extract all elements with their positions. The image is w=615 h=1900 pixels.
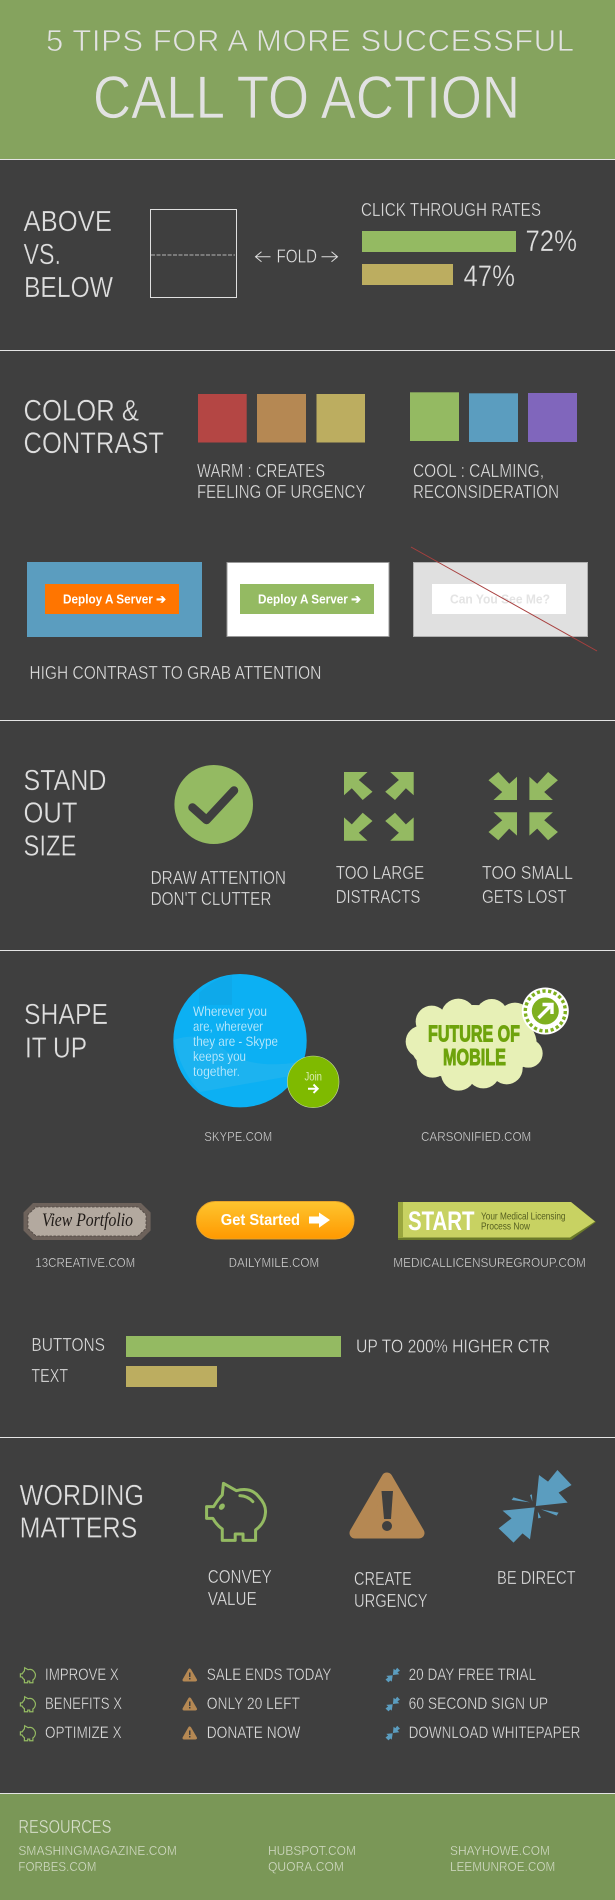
example: get started pill button bbox=[196, 1202, 354, 1239]
example: start arrow button bbox=[398, 1202, 596, 1240]
heading: wording matters: WORDING bbox=[20, 1480, 144, 1512]
cool caption: COOL : CALMING, bbox=[413, 461, 544, 481]
warm swatches bbox=[198, 394, 365, 442]
links column 3: SHAYHOWE.COM bbox=[450, 1843, 550, 1858]
example: orange button on blue bbox=[27, 562, 202, 637]
links column 1: FORBES.COM bbox=[18, 1859, 96, 1874]
caption: high contrast: HIGH CONTRAST TO GRAB ATTENTION bbox=[29, 663, 321, 683]
list: direct phrases: 60 SECOND SIGN UP bbox=[409, 1694, 548, 1713]
caption: draw attention: DON'T CLUTTER bbox=[151, 889, 271, 909]
header band bbox=[0, 0, 615, 160]
label: dailymile.com: DAILYMILE.COM bbox=[229, 1255, 319, 1270]
caption: too large bbox=[336, 863, 424, 907]
heading: stand out size: STAND bbox=[24, 765, 106, 797]
links column 3: LEEMUNROE.COM bbox=[450, 1859, 555, 1874]
example: start arrow button: Your Medical Licensing bbox=[481, 1210, 566, 1222]
icon: small warning bbox=[184, 1699, 196, 1709]
caption: too small: GETS LOST bbox=[482, 887, 567, 907]
example: skype circle button: Wherever you bbox=[193, 1003, 267, 1019]
chart: buttons vs text: BUTTONS bbox=[31, 1335, 105, 1355]
icon: check mark bbox=[174, 765, 253, 844]
caption: too small bbox=[482, 863, 573, 907]
list: value phrases: IMPROVE X bbox=[45, 1665, 119, 1684]
cool caption bbox=[413, 461, 559, 502]
cool swatches bbox=[410, 392, 577, 442]
caption: too small: TOO SMALL bbox=[482, 863, 573, 883]
icon: expanding arrows bbox=[344, 772, 414, 841]
heading: shape it up bbox=[24, 999, 108, 1064]
links column 2: HUBSPOT.COM bbox=[268, 1843, 356, 1858]
icon: small warning bbox=[184, 1670, 196, 1680]
icon: small pig bbox=[20, 1668, 35, 1683]
heading: above vs below: VS. bbox=[24, 239, 61, 271]
panel: stand out size bbox=[24, 765, 573, 909]
example: skype circle button: keeps you bbox=[193, 1048, 246, 1064]
label: skype.com: SKYPE.COM bbox=[204, 1129, 272, 1144]
caption: draw attention: DRAW ATTENTION bbox=[151, 868, 286, 888]
links column 3 bbox=[450, 1843, 555, 1874]
chart: click through rates: 47% bbox=[464, 260, 515, 293]
example: skype circle button bbox=[173, 974, 339, 1108]
chart: buttons vs text bbox=[31, 1335, 550, 1387]
links column 1 bbox=[18, 1843, 177, 1874]
example: orange button on blue: Deploy A Server ➔ bbox=[63, 592, 166, 606]
icon: small direct arrows bbox=[386, 1668, 400, 1682]
example: skype circle button: they are - Skype bbox=[193, 1033, 278, 1049]
example: carsonified cloud button: MOBILE bbox=[443, 1044, 506, 1070]
title line: 5 tips: 5 TIPS FOR A MORE SUCCESSFUL bbox=[46, 23, 574, 58]
label: carsonified.com: CARSONIFIED.COM bbox=[421, 1129, 531, 1144]
panel: above vs below bbox=[24, 199, 577, 304]
icon: small pig bbox=[20, 1697, 35, 1712]
heading: color and contrast bbox=[24, 394, 164, 460]
panel: wording matters bbox=[20, 1470, 580, 1742]
heading: shape it up: SHAPE bbox=[24, 999, 108, 1031]
page fold diagram bbox=[150, 210, 236, 298]
list: direct phrases bbox=[386, 1665, 580, 1742]
example: green button on white: Deploy A Server ➔ bbox=[258, 592, 361, 606]
title: call to action: CALL TO ACTION bbox=[93, 64, 520, 131]
heading: resources: RESOURCES bbox=[18, 1817, 111, 1837]
caption: draw attention bbox=[151, 868, 286, 909]
fold label with arrows bbox=[256, 246, 338, 266]
list: urgency phrases bbox=[184, 1665, 331, 1742]
heading: stand out size: OUT bbox=[24, 798, 78, 830]
list: urgency phrases: DONATE NOW bbox=[207, 1723, 300, 1742]
chart: click through rates bbox=[361, 199, 577, 293]
caption: convey value bbox=[208, 1567, 272, 1609]
footer: resources bbox=[0, 1793, 615, 1900]
example: view portfolio plaque bbox=[24, 1203, 151, 1240]
warm caption: FEELING OF URGENCY bbox=[197, 482, 366, 502]
heading: above vs below: BELOW bbox=[24, 272, 114, 304]
list: value phrases bbox=[20, 1665, 122, 1742]
chart: buttons vs text: TEXT bbox=[31, 1366, 68, 1386]
caption: be direct: BE DIRECT bbox=[497, 1568, 576, 1588]
chart: click through rates: 72% bbox=[526, 225, 577, 258]
heading: above vs below bbox=[24, 206, 114, 304]
list: value phrases: BENEFITS X bbox=[45, 1694, 122, 1713]
example: start arrow button: START bbox=[408, 1206, 475, 1236]
icon: small pig bbox=[20, 1726, 35, 1741]
icon: be direct arrows bbox=[499, 1470, 572, 1543]
heading: above vs below: ABOVE bbox=[24, 206, 112, 238]
caption: too large: TOO LARGE bbox=[336, 863, 424, 883]
links column 1: SMASHINGMAGAZINE.COM bbox=[18, 1843, 177, 1858]
warm caption: WARM : CREATES bbox=[197, 461, 325, 481]
example: skype circle button: are, wherever bbox=[193, 1018, 263, 1034]
chart: buttons vs text: UP TO 200% HIGHER CTR bbox=[356, 1336, 550, 1356]
panel: shape it up bbox=[24, 974, 596, 1387]
links column 2 bbox=[268, 1843, 356, 1874]
heading: shape it up: IT UP bbox=[25, 1032, 87, 1064]
example: green button on white bbox=[227, 562, 389, 636]
cool caption: RECONSIDERATION bbox=[413, 482, 559, 502]
icon: badge with arrow bbox=[522, 988, 569, 1034]
caption: convey value: VALUE bbox=[208, 1589, 257, 1609]
example: low contrast crossed out bbox=[411, 547, 597, 651]
example: low contrast crossed out: Can You See Me? bbox=[450, 592, 550, 606]
heading: color and contrast: CONTRAST bbox=[24, 427, 164, 460]
icon: small direct arrows bbox=[386, 1697, 400, 1711]
caption: create urgency bbox=[354, 1569, 428, 1611]
example: view portfolio plaque: View Portfolio bbox=[42, 1210, 133, 1231]
chart: click through rates: CLICK THROUGH RATES bbox=[361, 199, 541, 220]
heading: wording matters bbox=[20, 1480, 144, 1545]
example: start arrow button: Process Now bbox=[481, 1221, 530, 1233]
heading: wording matters: MATTERS bbox=[20, 1513, 137, 1545]
list: direct phrases: 20 DAY FREE TRIAL bbox=[409, 1665, 536, 1684]
list: urgency phrases: ONLY 20 LEFT bbox=[207, 1694, 300, 1713]
icon: small warning bbox=[184, 1728, 196, 1738]
warm caption bbox=[197, 461, 366, 502]
list: value phrases: OPTIMIZE X bbox=[45, 1723, 122, 1742]
example: carsonified cloud button: FUTURE OF bbox=[428, 1020, 520, 1046]
caption: convey value: CONVEY bbox=[208, 1567, 272, 1587]
icon: warning triangle bbox=[355, 1478, 419, 1533]
example: skype circle button: Join bbox=[304, 1072, 322, 1084]
caption: create urgency: CREATE bbox=[354, 1569, 412, 1589]
example: skype circle button: together. bbox=[193, 1063, 240, 1079]
heading: color and contrast: COLOR & bbox=[24, 394, 139, 428]
icon: small direct arrows bbox=[386, 1726, 400, 1740]
icon: contracting arrows bbox=[488, 772, 558, 840]
panel: color and contrast bbox=[24, 392, 597, 683]
example: get started pill button: Get Started bbox=[221, 1212, 300, 1229]
heading: stand out size bbox=[24, 765, 106, 863]
label: medicallicensuregroup.com: MEDICALLICENSUREGROUP.COM bbox=[393, 1255, 586, 1270]
list: urgency phrases: SALE ENDS TODAY bbox=[207, 1665, 331, 1684]
caption: too large: DISTRACTS bbox=[336, 887, 420, 907]
links column 2: QUORA.COM bbox=[268, 1859, 344, 1874]
caption: create urgency: URGENCY bbox=[354, 1591, 428, 1611]
icon: piggy bank bbox=[207, 1483, 266, 1540]
fold label with arrows: FOLD bbox=[276, 246, 317, 266]
label: 13creative.com: 13CREATIVE.COM bbox=[35, 1255, 135, 1270]
example: carsonified cloud button bbox=[406, 988, 569, 1091]
heading: stand out size: SIZE bbox=[24, 831, 76, 863]
